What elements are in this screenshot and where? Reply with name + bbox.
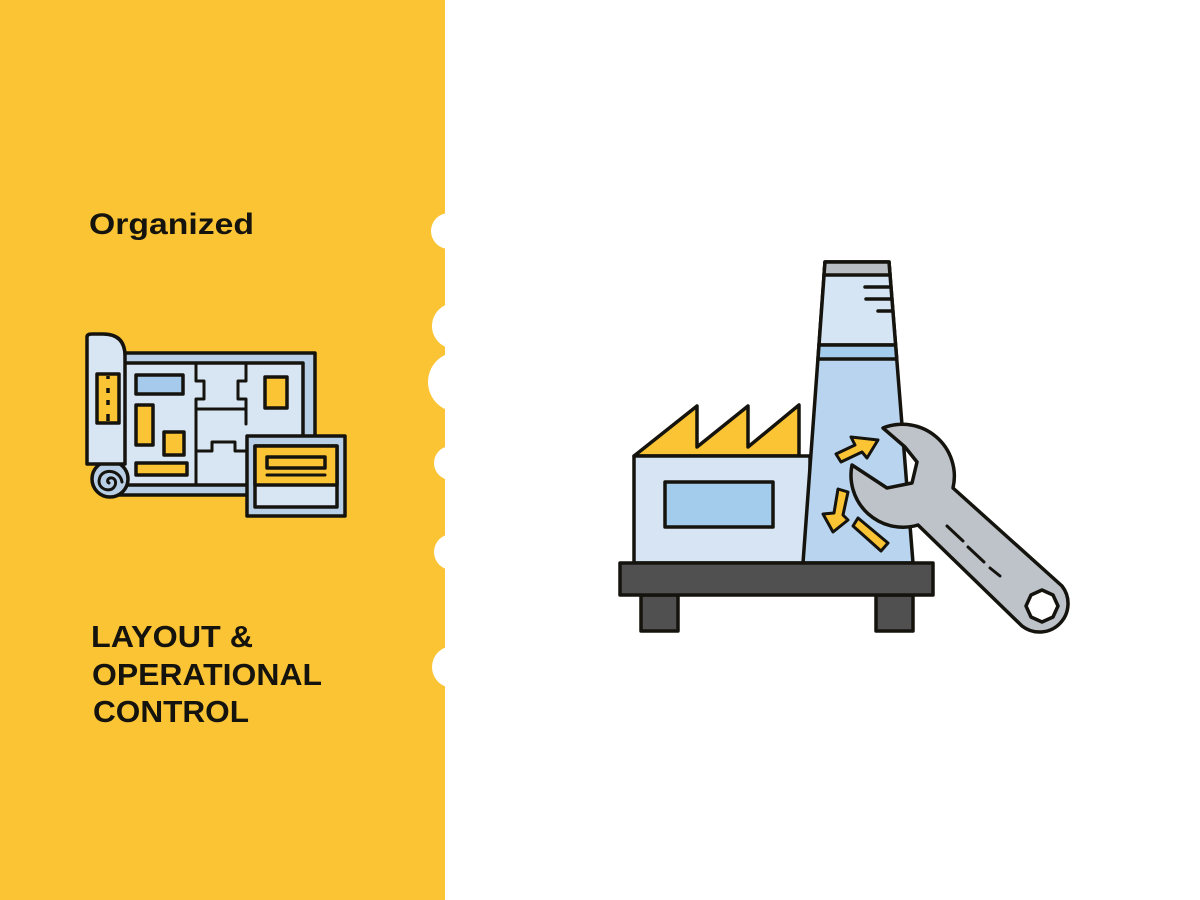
icon: factory with wrench — [620, 262, 1068, 632]
blueprint scroll roll — [87, 334, 128, 497]
panel: yellow side panel with scalloped edge — [0, 0, 488, 900]
blueprint detail card — [247, 436, 345, 516]
recycling arrows — [823, 437, 888, 551]
blueprint sheet — [105, 353, 315, 495]
icon: blueprint floor plan — [87, 334, 345, 516]
factory roof — [634, 405, 799, 456]
blueprint wall lines — [196, 363, 247, 485]
wrench — [851, 424, 1068, 632]
factory window — [665, 482, 773, 527]
chimney — [803, 262, 913, 563]
factory building — [634, 456, 810, 563]
factory base platform — [620, 563, 933, 631]
heading: Organized: Organized — [89, 208, 254, 241]
heading: Layout and operational control: CONTROL — [93, 694, 249, 729]
heading: Layout and operational control: LAYOUT & — [91, 619, 253, 654]
blueprint room blocks — [136, 375, 287, 475]
heading: Layout and operational control: OPERATIONAL — [92, 657, 322, 692]
heading: Layout and operational control — [91, 619, 322, 729]
